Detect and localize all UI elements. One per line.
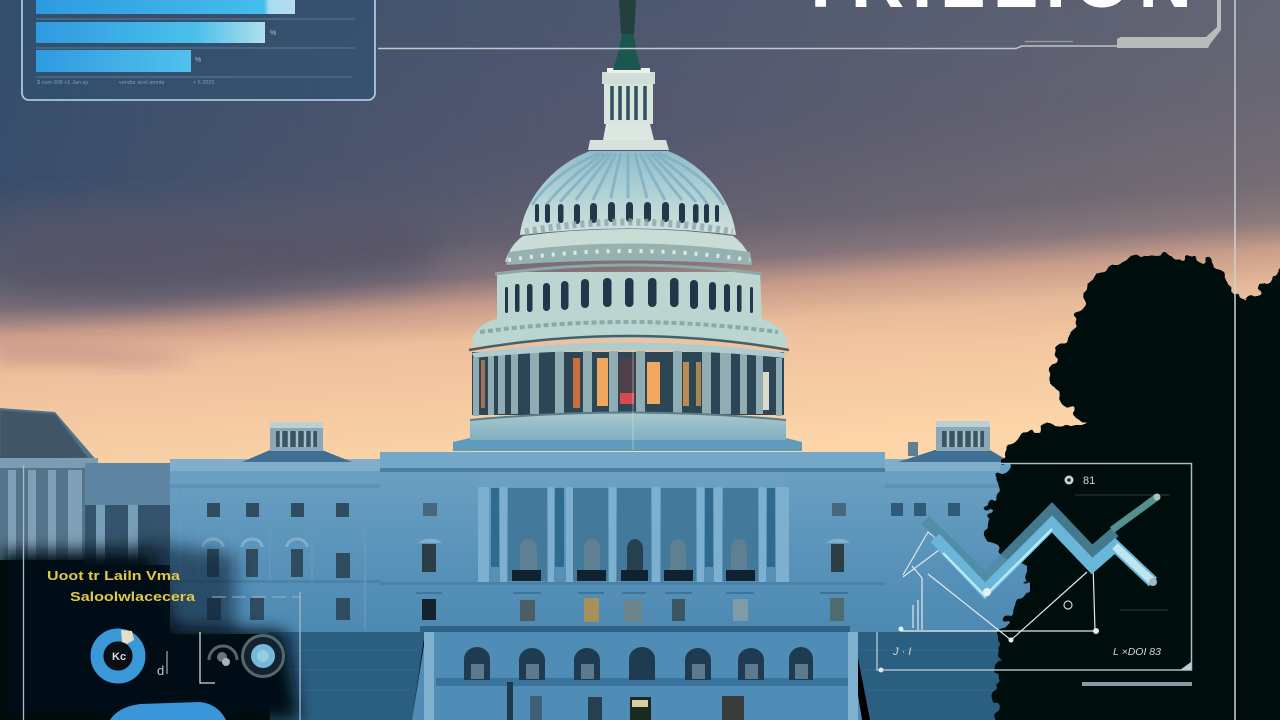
dome shell: [520, 151, 736, 235]
chart baseline and axes: [901, 532, 1096, 640]
lower row windows: [422, 598, 844, 622]
small cupola left: [242, 422, 352, 462]
background: sunset sky: [0, 0, 1280, 470]
chart labels: J · I: [892, 646, 911, 658]
small cupola right: [898, 421, 1010, 462]
small glyph label: [157, 651, 167, 678]
terrace arches: [464, 647, 813, 680]
statue of freedom: [613, 0, 641, 70]
caption: yellow text: Uoot tr Lailn Vma: [47, 569, 181, 583]
gauge icon: [209, 646, 237, 666]
bar three: [36, 50, 191, 72]
staircases: [268, 632, 1005, 720]
donut chart: [97, 630, 139, 677]
platform under the rotunda: [453, 438, 802, 451]
far left building: [0, 408, 175, 565]
frame vertical line right: [1234, 0, 1236, 720]
terrace ground doors: [507, 682, 744, 720]
small glyph label: d: [157, 663, 164, 678]
axis captions: vendor annl amnts: [119, 80, 164, 86]
caption: yellow text: [47, 569, 196, 604]
chart labels: 81: [1083, 475, 1095, 487]
axis captions: [37, 80, 215, 86]
portico arched doors: [520, 539, 747, 570]
dome ribs: [532, 153, 724, 205]
dome oculi: [535, 202, 719, 224]
terrace with arches: [412, 632, 862, 720]
donut chart: Kc: [112, 651, 126, 663]
panel: line chart bottom right: [877, 464, 1192, 686]
portico recessed bays: [508, 488, 758, 581]
lantern base: [588, 140, 669, 150]
chart labels: [892, 475, 1161, 658]
rotunda base: [470, 412, 786, 440]
shaded wall behind the lower left caption: [140, 540, 235, 640]
axis captions: + 6 2025: [193, 80, 215, 86]
glowing windows: [481, 358, 769, 410]
left wing of the Capitol: [170, 422, 382, 634]
bar value marks: %: [270, 30, 276, 37]
upper and pediment windows: [418, 503, 850, 572]
cropped blue shape bottom: [110, 702, 226, 720]
tholos lantern: [602, 68, 655, 140]
bar two: [36, 22, 265, 43]
left wing windows: [207, 503, 350, 620]
zigzag trend line: [925, 497, 1157, 596]
bar value marks: %: [195, 57, 201, 64]
axis captions: $ com 008 +1 Jan ay: [37, 80, 88, 86]
bracket line: [200, 632, 215, 683]
main central block: [380, 452, 885, 632]
tree silhouette: [985, 255, 1280, 720]
dial icon: [242, 636, 284, 676]
portico columns: [478, 487, 789, 582]
columns: [473, 351, 782, 416]
right wing of the Capitol: [880, 421, 1030, 634]
colonnade: [472, 351, 784, 416]
frame vertical lines left: [24, 465, 300, 720]
balustrade band: [505, 229, 752, 262]
cornice ring: [473, 318, 787, 347]
chart labels: L ×DOI 83: [1113, 646, 1161, 658]
dark shadow lower left: [0, 550, 300, 720]
windowed drum: [497, 272, 762, 320]
caption: yellow text: Saloolwlacecera: [70, 590, 196, 604]
Capitol dome: [453, 0, 802, 451]
bar one: [36, 0, 295, 14]
headline frame: [378, 0, 1221, 48]
drum windows: [505, 278, 753, 313]
balconies: [512, 570, 755, 581]
bar value marks: [195, 30, 276, 64]
panel: top-left bar chart: [22, 0, 375, 100]
